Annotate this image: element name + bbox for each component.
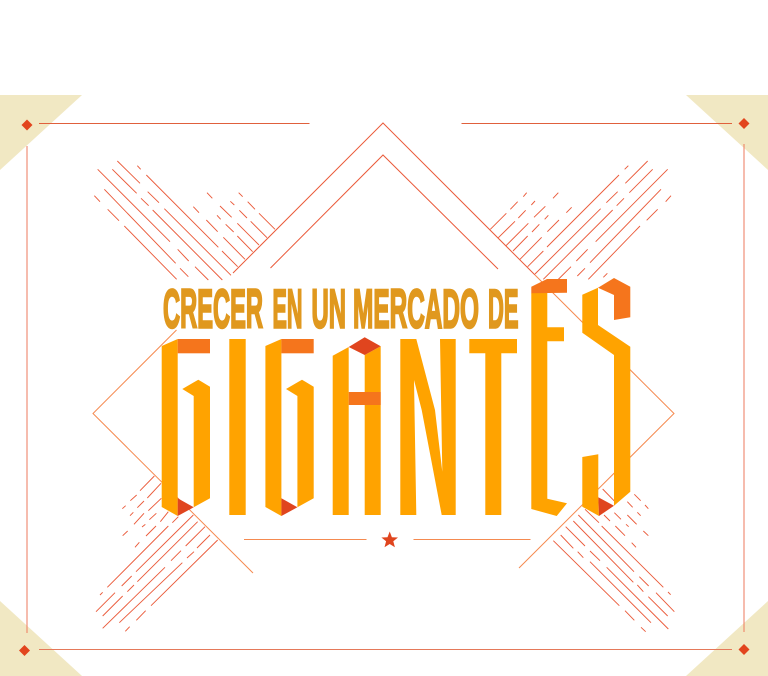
corner diamonds [19,118,750,656]
headline: EN [272,278,302,340]
infographic title artwork: DE [488,278,518,340]
stripes: top right [490,161,671,280]
letter T [469,339,517,515]
stripes: top left [94,161,275,280]
headline: CRECER [163,278,263,340]
letter S [582,278,630,516]
outer frame lines [27,124,744,650]
letter E [531,279,567,516]
letter I [229,339,246,515]
headline [163,278,518,340]
letter G second [265,339,314,516]
big word: GIGANTES [162,278,630,516]
headline: UN [312,278,346,340]
letter N [400,339,456,515]
stripes: bottom right [553,489,674,632]
icon: star [381,532,398,547]
letter A [333,337,381,515]
letter G [162,339,210,516]
stripes: bottom left [96,476,218,631]
divider with star [244,532,530,547]
outer diamond lines [93,123,674,573]
headline: MERCADO [353,278,479,340]
inner diamond chevron [270,155,498,269]
